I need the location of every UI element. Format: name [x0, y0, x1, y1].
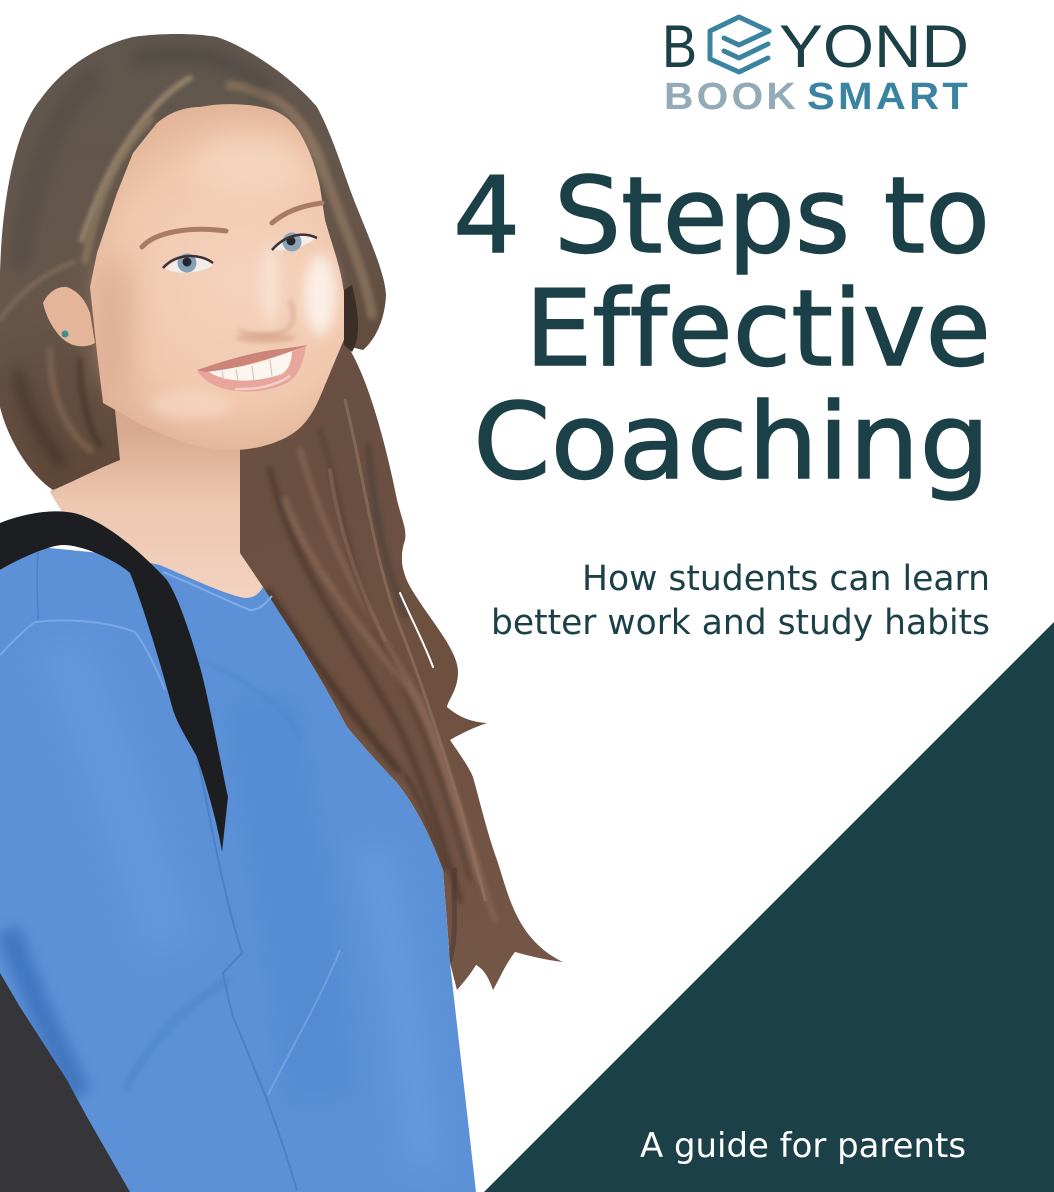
subtitle: better work and study habits: [491, 603, 990, 643]
logo: Beyond BookSmart: [662, 13, 971, 118]
mouth: [197, 345, 308, 392]
hair lock over cheek: [344, 285, 358, 352]
subtitle: [491, 559, 990, 643]
logo word: BOOK: BOOK: [664, 76, 799, 118]
neck and chest: [50, 400, 285, 620]
logo word: B: B: [662, 13, 697, 80]
backpack strap: [0, 511, 228, 852]
title: Effective: [525, 268, 991, 390]
title: Coaching: [473, 381, 990, 503]
hair highlights: [0, 54, 372, 462]
eye right: [272, 232, 317, 252]
title: 4 Steps to: [453, 155, 990, 277]
photo: student with backpack: [0, 34, 563, 1192]
logo word: SMART: SMART: [807, 76, 971, 118]
sweater shading: [0, 552, 425, 1190]
backpack mesh body: [0, 973, 130, 1192]
face shading and highlights: [97, 135, 336, 419]
blue sweater: [0, 547, 476, 1192]
eye left: [163, 254, 213, 273]
nose: [238, 300, 293, 335]
logo hexagon book icon: [710, 17, 769, 72]
long hair: [240, 330, 563, 990]
dark triangle panel: [484, 622, 1054, 1192]
footer text: A guide for parents: [640, 1126, 966, 1166]
ear with earring: [43, 287, 95, 346]
long hair strands: [268, 400, 495, 960]
title: [453, 155, 991, 503]
subtitle: How students can learn: [582, 559, 990, 599]
face: [90, 104, 346, 450]
head hair: [0, 34, 386, 490]
eyebrows: [142, 203, 322, 247]
logo word: YOND: YOND: [779, 13, 969, 80]
